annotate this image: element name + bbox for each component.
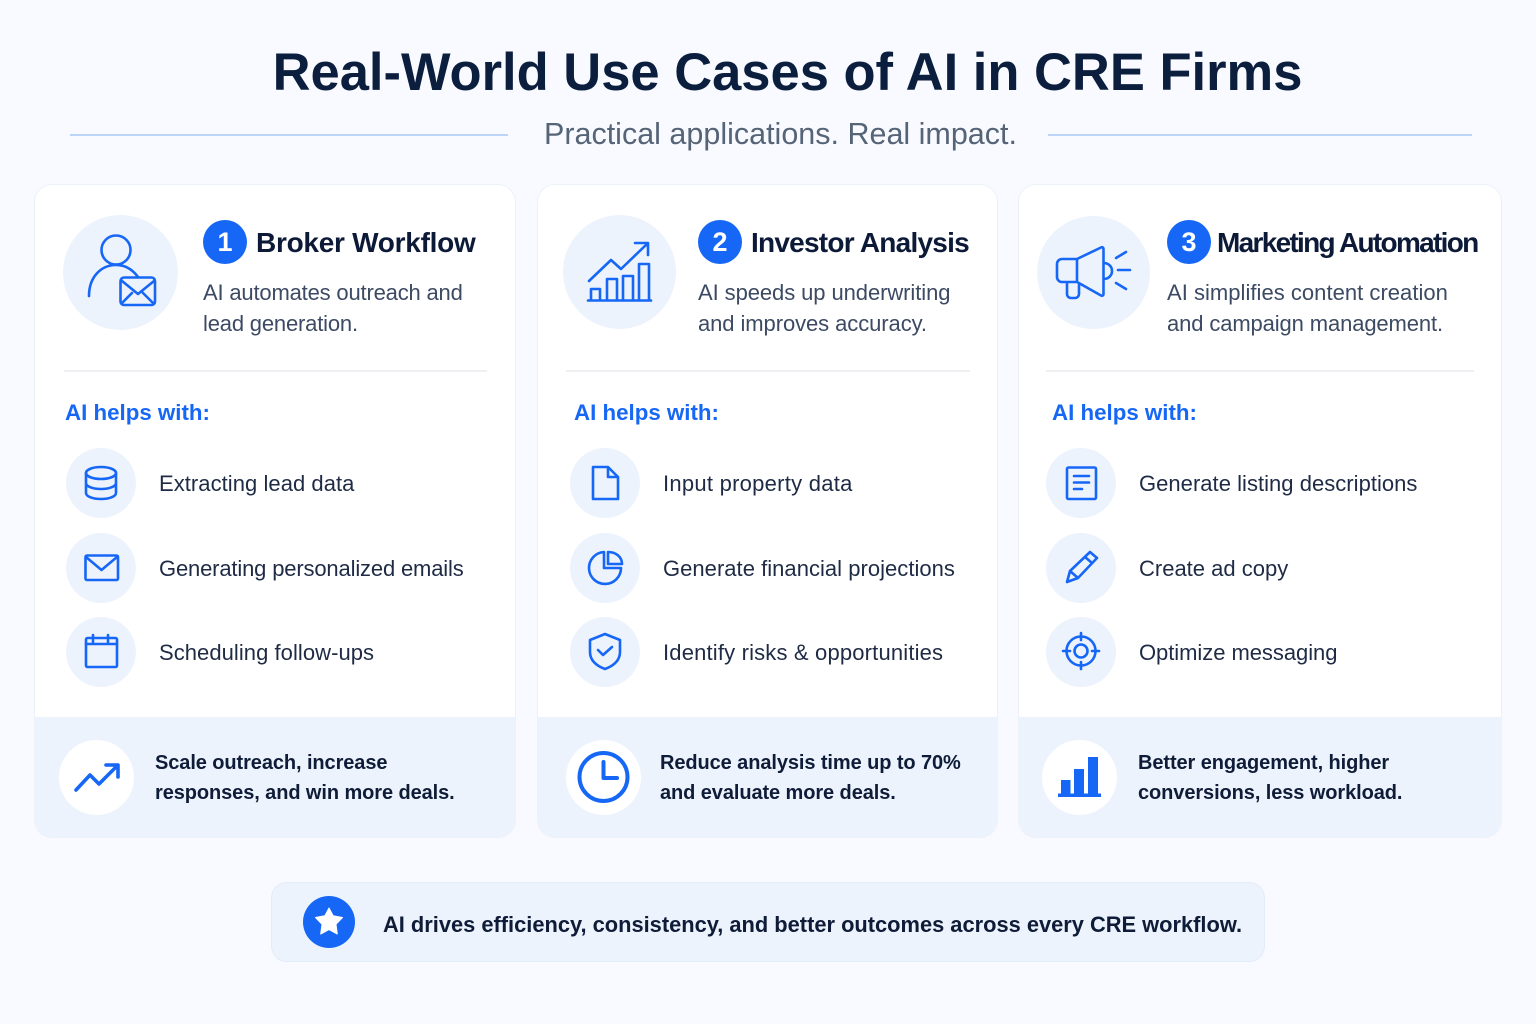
item: identify risks: Identify risks & opportunities [663, 640, 943, 665]
icon: star badge [303, 896, 355, 948]
icon: target [1046, 617, 1116, 687]
subtitle: Practical applications. Real impact. [544, 117, 1017, 151]
icon: broker person with envelope [63, 215, 178, 330]
icon: trend arrow [59, 740, 134, 815]
heading: marketing automation: Marketing Automation [1217, 227, 1478, 258]
description: broker: AI automates outreach and [203, 280, 463, 305]
banner: key takeaway [271, 882, 1265, 962]
icon: mail [66, 533, 136, 603]
icon: bar chart [1042, 740, 1117, 815]
outcome: broker: responses, and win more deals. [155, 782, 455, 804]
panel: marketing automation [1018, 184, 1502, 838]
item: extracting lead data: Extracting lead data [159, 471, 354, 496]
outcome: marketing: Better engagement, higher [1138, 752, 1389, 774]
panel footer: marketing outcome [1019, 717, 1501, 837]
description: marketing: AI simplifies content creation [1167, 280, 1448, 305]
heading: broker workflow: Broker Workflow [256, 227, 475, 258]
icon: database [66, 448, 136, 518]
icon: document [570, 448, 640, 518]
item: generate listing descriptions: Generate listing descriptions [1139, 471, 1417, 496]
panel: broker workflow [34, 184, 516, 838]
item: optimize messaging: Optimize messaging [1139, 640, 1337, 665]
title: Real-World Use Cases of AI in CRE Firms [273, 43, 1302, 102]
panel footer: broker outcome [35, 717, 515, 837]
number badge 2: 2 [712, 227, 728, 257]
icon: pencil [1046, 533, 1116, 603]
item: generating personalized emails: Generating personalized emails [159, 556, 464, 581]
outcome: investor [660, 752, 961, 804]
number badge 1 [203, 220, 247, 264]
panel: investor analysis [537, 184, 998, 838]
heading: investor analysis: Investor Analysis [751, 227, 969, 258]
label: AI helps with: AI helps with: [65, 400, 210, 425]
item: scheduling follow-ups: Scheduling follow-ups [159, 640, 374, 665]
icon: megaphone [1037, 216, 1150, 329]
number badge 1: 1 [217, 227, 233, 257]
item: create ad copy: Create ad copy [1139, 556, 1288, 581]
outcome: marketing [1138, 752, 1402, 804]
takeaway text: AI drives efficiency, consistency, and better outcomes across every CRE workflow. [383, 912, 1242, 937]
description: marketing [1167, 280, 1448, 336]
item: generate financial projections: Generate financial projections [663, 556, 955, 581]
number badge 2 [698, 220, 742, 264]
outcome: marketing: conversions, less workload. [1138, 782, 1402, 804]
description: broker [203, 280, 463, 336]
label: AI helps with: AI helps with: [1052, 400, 1197, 425]
description: broker: lead generation. [203, 311, 358, 336]
outcome: investor: and evaluate more deals. [660, 782, 896, 804]
outcome: investor: Reduce analysis time up to 70% [660, 752, 961, 774]
description: investor: and improves accuracy. [698, 311, 927, 336]
description: marketing: and campaign management. [1167, 311, 1443, 336]
icon: calendar [66, 617, 136, 687]
label: AI helps with: AI helps with: [574, 400, 719, 425]
description: investor: AI speeds up underwriting [698, 280, 950, 305]
description: investor [698, 280, 950, 336]
panel footer: investor outcome [538, 717, 997, 837]
icon: listing document [1046, 448, 1116, 518]
icon: clock [566, 740, 641, 815]
number badge 3 [1167, 220, 1211, 264]
icon: pie chart [570, 533, 640, 603]
icon: shield check [570, 617, 640, 687]
outcome: broker: Scale outreach, increase [155, 752, 387, 774]
item: input property data: Input property data [663, 471, 853, 496]
icon: growth chart [563, 215, 676, 329]
outcome: broker [155, 752, 455, 804]
number badge 3: 3 [1181, 227, 1197, 257]
